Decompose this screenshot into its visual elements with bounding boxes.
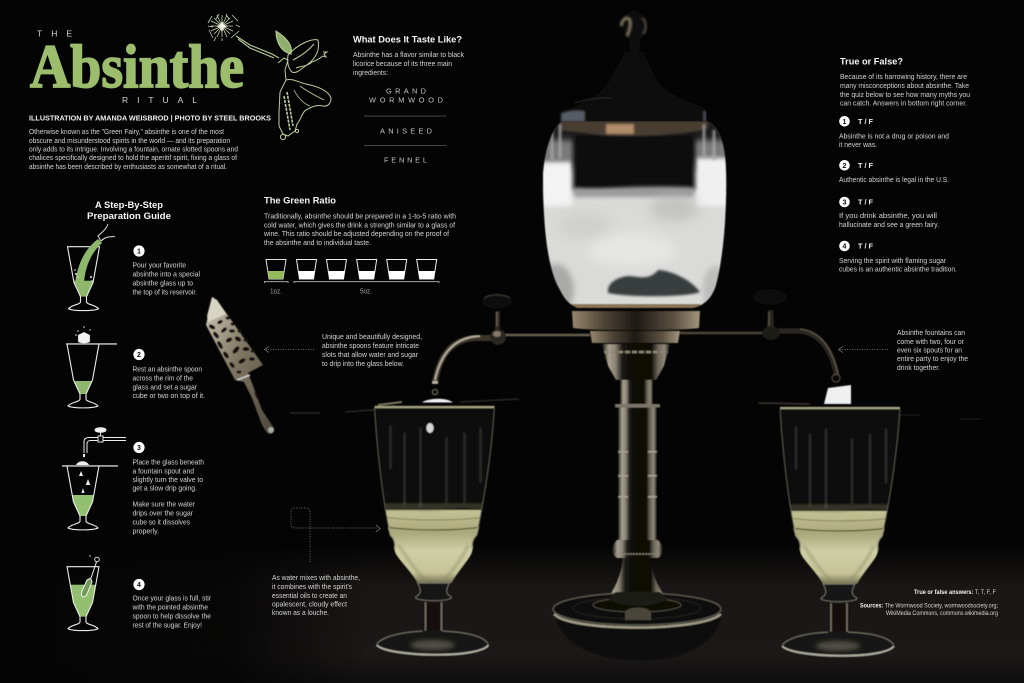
step 1 text: the top of its reservoir. <box>132 290 197 296</box>
intro text block: absinthe has been described by enthusiasts as somewhat of a ritual. <box>29 164 227 171</box>
title: THE <box>37 28 72 38</box>
ratio description: cold water, which gives the drink a strength similar to a glass of <box>264 222 455 230</box>
arrow: louche callout <box>291 508 380 562</box>
intro text block: Otherwise known as the "Green Fairy," absinthe is one of the most <box>29 129 224 136</box>
arrow: spouts callout <box>838 346 888 352</box>
step number 2: 2 <box>137 352 141 359</box>
question 1: 1 <box>843 119 847 126</box>
ingredient list: WORMWOOD <box>369 96 443 105</box>
step 2 text: cube or two on top of it. <box>132 393 205 400</box>
heading <box>87 200 171 221</box>
green cup <box>266 260 286 279</box>
drop of water <box>426 423 434 433</box>
taste description <box>353 52 465 77</box>
icon: glass with spoon and sugar <box>66 326 117 408</box>
heading: What Does It Taste Like? <box>353 34 462 44</box>
step 3 text <box>132 460 204 536</box>
panel: preparation guide <box>62 200 212 631</box>
question 3: If you drink absinthe, you will <box>839 213 938 220</box>
ingredient list: GRAND <box>386 87 426 96</box>
callout: spoons: Unique and beautifully designed, <box>322 334 422 341</box>
question 3: 3 <box>843 200 847 206</box>
sources: WikiMedia Commons, commons.wikimedia.org <box>886 611 998 617</box>
step 3 <box>62 428 204 536</box>
panel: true or false <box>839 56 970 274</box>
callout: louche: known as a louche. <box>272 610 329 617</box>
question 4: cubes is an authentic absinthe tradition. <box>839 266 957 274</box>
step 2 text: glass and set a sugar <box>132 384 198 392</box>
question 1: Absinthe is not a drug or poison and <box>839 134 949 140</box>
ratio description: Traditionally, absinthe should be prepared in a 1-to-5 ratio with <box>264 214 456 220</box>
chart: ratio cups <box>264 260 439 295</box>
step 4 text <box>132 596 212 630</box>
step 4 <box>66 555 212 631</box>
fountain pedestal base <box>553 592 721 660</box>
callout: spoons: to drip into the glass below. <box>322 361 404 368</box>
quiz intro: many misconceptions about absinthe. Take <box>840 83 969 90</box>
callout: louche: essential oils to create an <box>272 593 347 600</box>
callout: louche: it combines with the spirit's <box>272 584 353 591</box>
callout: louche <box>272 575 360 617</box>
photo: absinthe fountain <box>290 10 982 660</box>
callout: spoons: slots that allow water and sugar <box>322 352 419 359</box>
question 2: 2 <box>843 163 847 170</box>
step 2 text: across the rim of the <box>132 376 193 382</box>
intro text block: obscure and misunderstood spirits in the world — and its preparation <box>29 138 230 145</box>
question 3: T / F <box>858 198 874 206</box>
right sugar and spoon <box>758 385 982 419</box>
right spout and valve <box>680 289 840 382</box>
question 4: Serving the spirit with flaming sugar <box>839 258 947 265</box>
water cups <box>296 260 437 279</box>
question 3 <box>839 197 939 229</box>
question 4 <box>839 241 957 274</box>
callout: spouts: come with two, four or <box>897 339 965 346</box>
question 2: Authentic absinthe is legal in the U.S. <box>839 177 949 184</box>
step number 3: 3 <box>137 445 141 452</box>
icon: glass under fountain spout <box>62 428 126 530</box>
question 1 <box>839 116 949 149</box>
step 3 text: cube so it dissolves <box>132 520 191 526</box>
label 5oz: 5oz. <box>360 288 372 295</box>
step 4 text: with the pointed absinthe <box>132 604 208 612</box>
ingredient list <box>364 87 446 165</box>
step number 4: 4 <box>137 582 141 589</box>
question 4: 4 <box>843 244 847 250</box>
brackets <box>264 282 439 283</box>
step 1 text: Pour your favorite <box>132 262 186 270</box>
step 3 text: a fountain spout and <box>132 468 194 476</box>
callout: louche: As water mixes with absinthe, <box>272 575 360 582</box>
callout: spouts <box>897 330 968 372</box>
quiz intro: can catch. Answers in bottom right corner. <box>840 101 967 108</box>
taste description: Absinthe has a flavor similar to black <box>353 52 465 59</box>
question 1: it never was. <box>839 142 877 149</box>
step 4 text: Once your glass is full, stir <box>132 596 212 602</box>
taste description: licorice because of its three main <box>353 61 452 68</box>
step 1 text <box>132 262 200 296</box>
fountain base ring <box>572 311 700 380</box>
step 3 text: drips over the sugar <box>132 510 194 518</box>
icon: pouring glass <box>66 224 115 311</box>
callout: spoons: absinthe spoons feature intricate <box>322 343 419 350</box>
icon: stirring glass <box>66 555 100 631</box>
left spout and valve <box>432 293 590 395</box>
fountain lid and finial <box>561 10 708 122</box>
title: Absinthe <box>30 34 244 101</box>
step number 3 <box>133 442 145 453</box>
label 1oz: 1oz. <box>270 288 282 295</box>
fountain column <box>607 380 667 599</box>
taste description: ingredients: <box>353 70 388 77</box>
heading: True or False? <box>840 56 903 66</box>
heading: A Step-By-Step <box>95 200 163 210</box>
step 2 text <box>132 366 205 400</box>
left sugar and spoon <box>290 399 519 413</box>
quiz intro: the quiz below to see how many myths you <box>840 92 970 99</box>
photo: absinthe spoon <box>206 297 274 434</box>
ratio description <box>263 214 456 247</box>
fountain water jar <box>542 120 728 309</box>
callout: spouts: Absinthe fountains can <box>897 330 965 337</box>
callout: spoons <box>322 334 422 368</box>
question 2: T / F <box>858 161 874 170</box>
callout: louche: opalescent, cloudy effect <box>272 601 347 608</box>
intro text block <box>29 129 238 171</box>
step 3 text: get a slow drip going. <box>132 486 197 492</box>
quiz intro: Because of its harrowing history, there are <box>840 74 967 81</box>
ingredient list: FENNEL <box>384 156 427 165</box>
question 1: T / F <box>858 117 874 126</box>
callout: spouts: even six spouts for an <box>897 348 962 354</box>
step 1 <box>66 224 200 311</box>
step 3 text: properly. <box>132 528 159 536</box>
step 3 text: slightly turn the valve to <box>132 477 203 484</box>
heading: The Green Ratio <box>264 196 336 206</box>
ratio description: the absinthe and to individual taste. <box>264 240 371 247</box>
callout: spouts: entire party to enjoy the <box>897 356 968 363</box>
ingredient list: ANISEED <box>380 127 432 136</box>
table surface <box>0 545 1024 683</box>
step number 4 <box>133 579 145 590</box>
step 2 <box>66 326 205 408</box>
quiz answers: True or false answers: T, T, F, F <box>914 590 996 596</box>
step 1 text: absinthe into a special <box>132 272 200 278</box>
question 2 <box>839 160 949 184</box>
left absinthe glass <box>372 407 496 658</box>
arrow: spoon callout <box>264 346 314 352</box>
intro text block: chalices specifically designed to hold the aperitif spirit, fixing a glass of <box>29 155 237 162</box>
step 2 text: Rest an absinthe spoon <box>132 366 202 374</box>
sources <box>860 604 998 617</box>
credits line: ILLUSTRATION BY AMANDA WEISBROD | PHOTO BY STEEL BROOKS <box>29 113 271 122</box>
step 4 text: spoon to help dissolve the <box>132 614 211 620</box>
step 1 text: absinthe glass up to <box>132 280 193 288</box>
right absinthe glass <box>778 408 902 658</box>
step 4 text: rest of the sugar. Enjoy! <box>132 622 202 630</box>
question 3: hallucinate and see a green fairy. <box>839 222 939 229</box>
callout: spouts: drink together. <box>897 365 940 372</box>
sources: Sources: The Wormwood Society, wormwoodsociety.org; <box>860 604 998 610</box>
heading: Preparation Guide <box>87 211 171 221</box>
quiz intro <box>840 74 970 108</box>
step 3 text: Place the glass beneath <box>132 460 204 466</box>
intro text block: only adds to its intrigue. Involving a fountain, ornate slotted spoons and <box>29 146 238 154</box>
question 4: T / F <box>858 242 874 250</box>
step 3 text: Make sure the water <box>132 502 196 508</box>
panel: what does it taste like <box>353 34 465 165</box>
ratio description: wine. This ratio should be adjusted depending on the proof of <box>263 231 449 238</box>
icon: green fairy <box>208 14 331 140</box>
title: RITUAL <box>122 95 197 105</box>
panel: the green ratio <box>263 196 456 295</box>
step number 1: 1 <box>137 248 141 256</box>
